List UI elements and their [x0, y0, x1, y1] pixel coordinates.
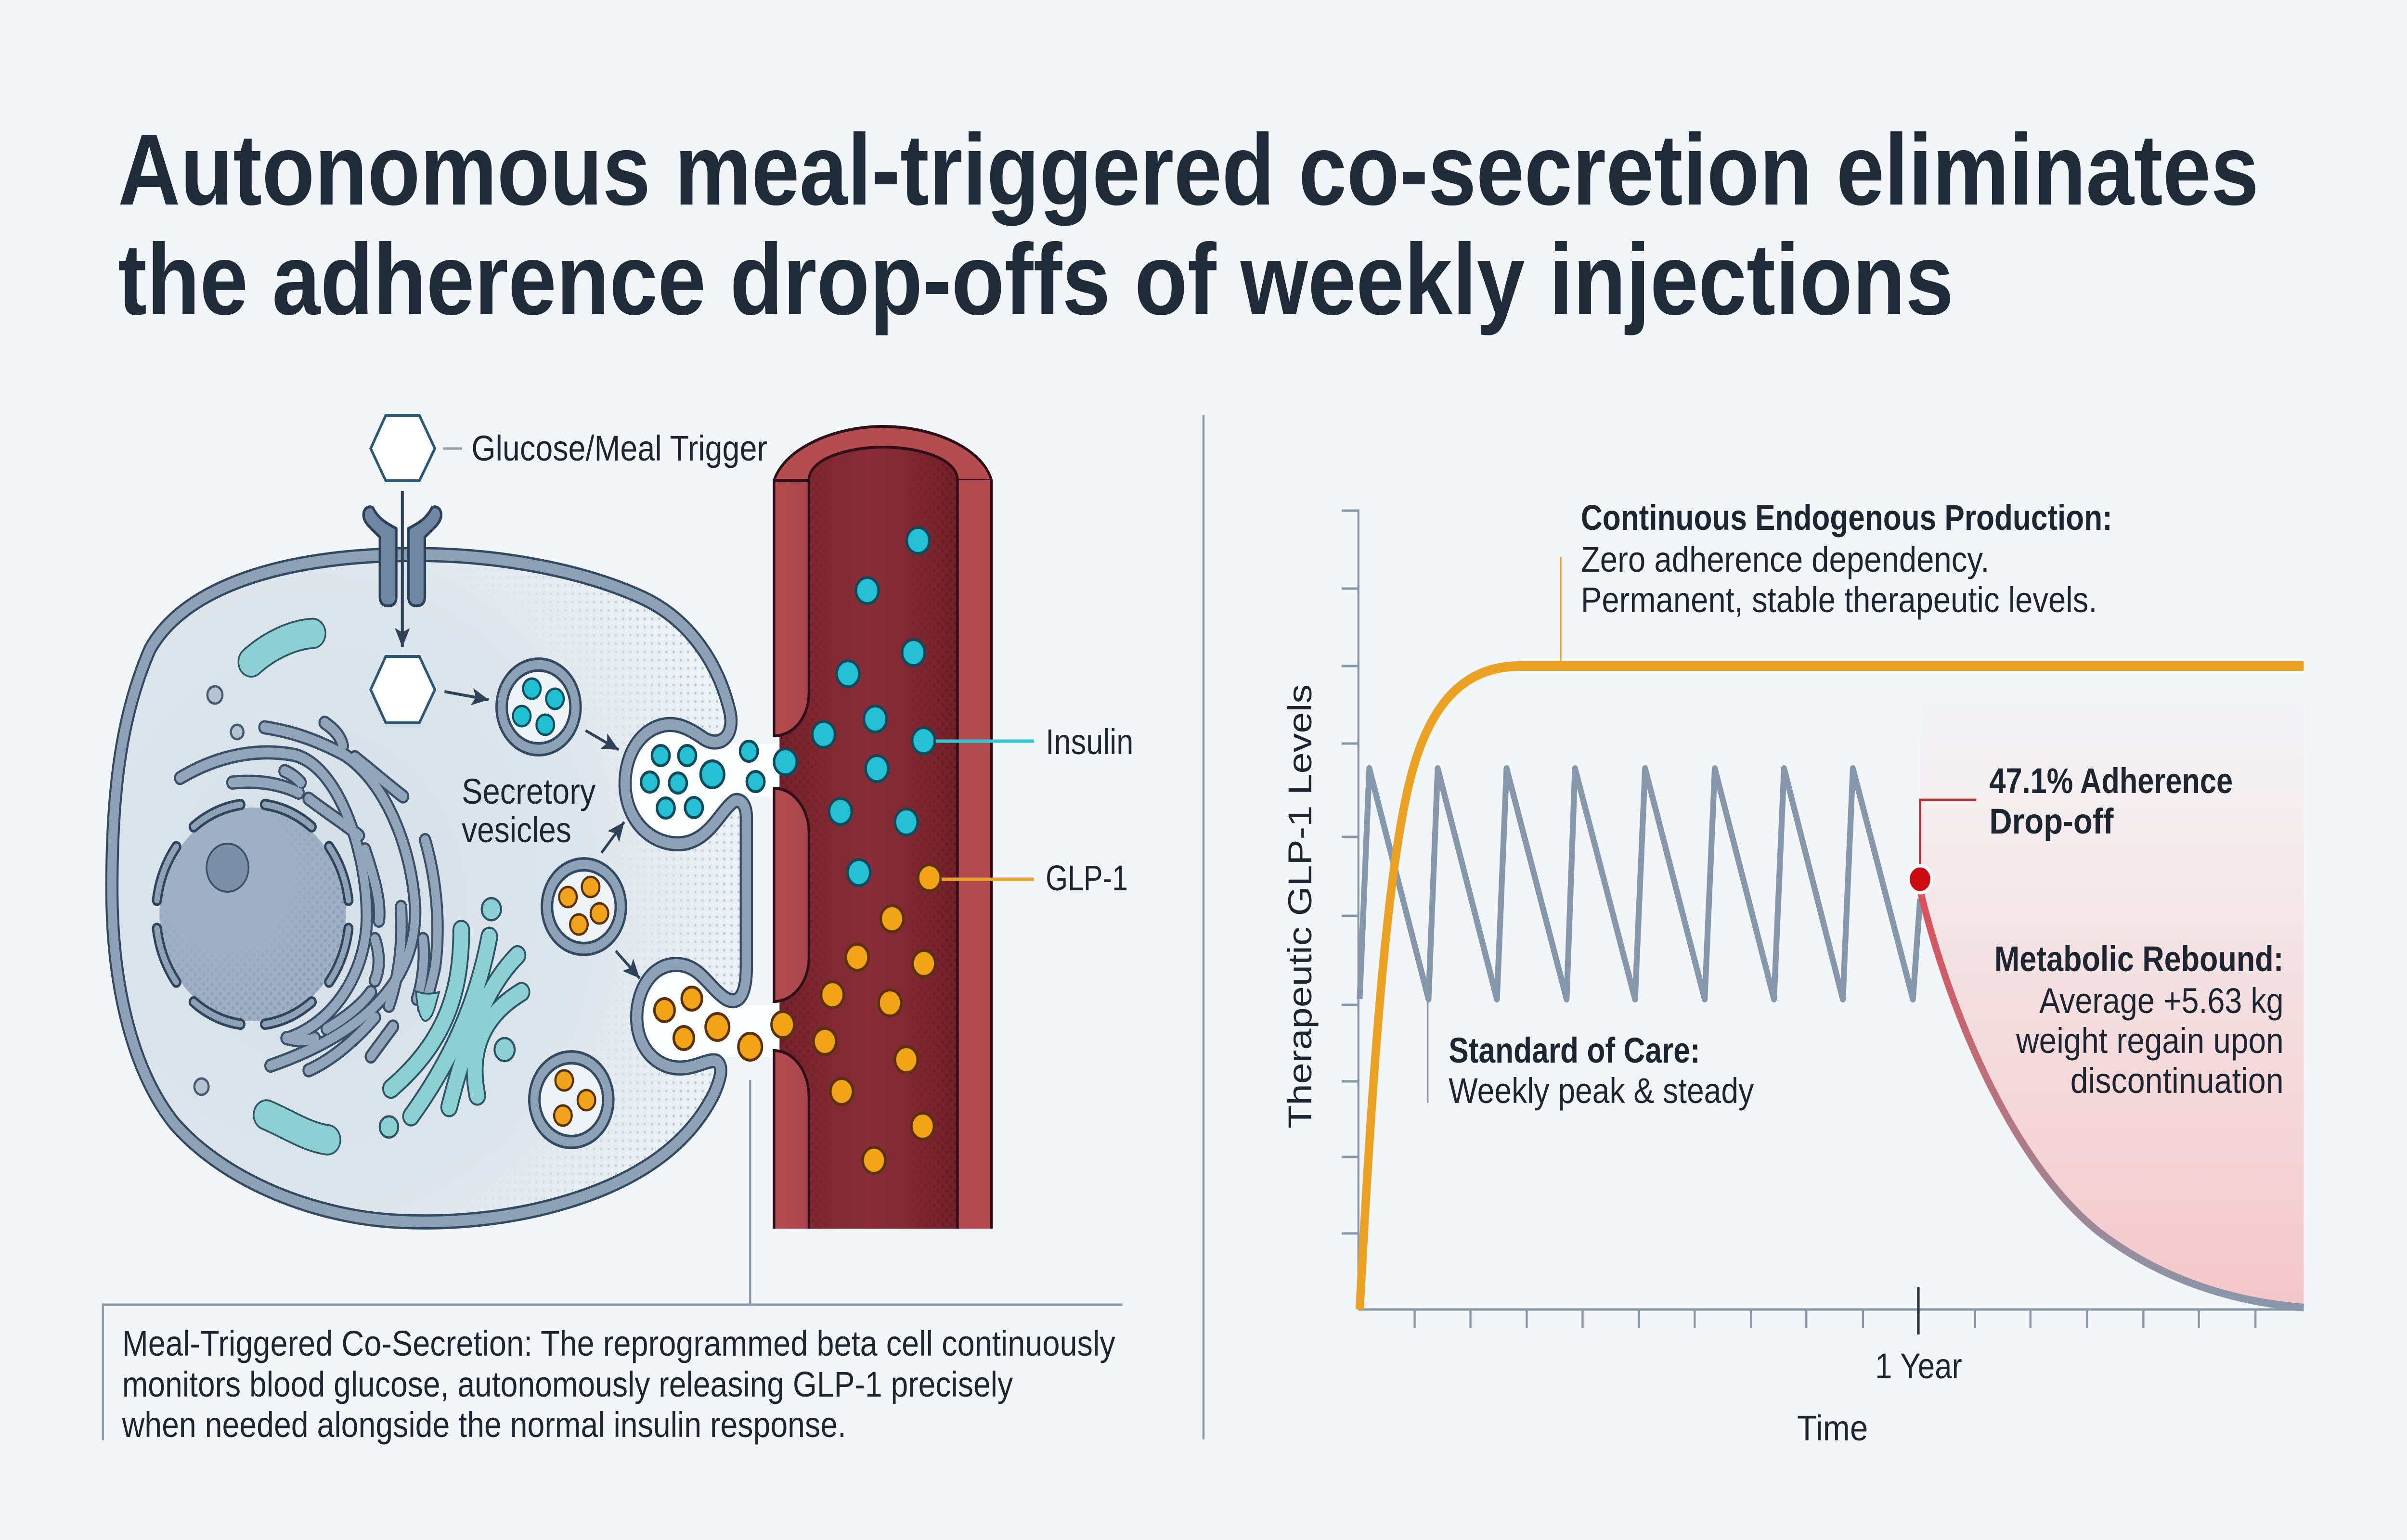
secretory vesicles label	[462, 771, 596, 850]
secretory vesicles label: Secretory	[462, 771, 596, 811]
callout: meal-triggered co-secretion: when needed alongside the normal insulin response.	[122, 1405, 846, 1445]
continuous production annotation: Permanent, stable therapeutic levels.	[1581, 580, 2097, 620]
x axis label: Time	[1797, 1408, 1868, 1448]
callout: meal-triggered co-secretion: monitors blood glucose, autonomously releasing GLP-1 precisely	[122, 1364, 1013, 1404]
insulin vesicle	[502, 665, 576, 749]
beta cell body	[112, 554, 781, 1222]
arrow: GLP-1 vesicle to upper membrane	[602, 822, 624, 853]
mitochondria	[251, 633, 327, 1140]
adherence drop-off marker and label: 47.1% Adherence	[1989, 761, 2233, 801]
metabolic rebound curve	[1920, 890, 2303, 1308]
1 year label: 1 Year	[1875, 1346, 1962, 1386]
weekly injection sawtooth line	[1359, 769, 1920, 999]
arrow: glucose entering cell	[401, 491, 404, 647]
metabolic rebound annotation: discontinuation	[2071, 1061, 2284, 1101]
continuous production annotation: Continuous Endogenous Production:	[1581, 498, 2112, 538]
blood vessel	[774, 426, 992, 1229]
icon: glucose hexagon outside	[371, 415, 435, 481]
metabolic rebound annotation: weight regain upon	[2016, 1021, 2284, 1061]
rebound shaded area	[1920, 674, 2303, 1308]
arrow: insulin vesicle to membrane	[585, 731, 619, 750]
callout: meal-triggered co-secretion: Meal-Triggered Co-Secretion: The reprogrammed beta cell continuously	[122, 1323, 1115, 1363]
continuous production annotation	[1561, 498, 2112, 663]
x axis	[1359, 1287, 2303, 1335]
y axis	[1342, 511, 1359, 1309]
icon: glucose hexagon inside	[371, 656, 435, 723]
title: the adherence drop-offs of weekly injections	[118, 223, 1954, 336]
GLP-1 label: GLP-1	[1046, 858, 1128, 898]
continuous production annotation: Zero adherence dependency.	[1581, 539, 1989, 579]
secretory vesicles label: vesicles	[462, 810, 571, 850]
nucleus	[156, 804, 349, 1025]
GLP-1 particles	[654, 865, 941, 1173]
insulin label: Insulin	[1046, 722, 1133, 762]
panel: beta cell and blood vessel diagram	[112, 415, 1133, 1229]
endoplasmic reticulum	[180, 723, 438, 1070]
metabolic rebound annotation	[1994, 939, 2284, 1101]
arrow: glucose to vesicle	[444, 692, 489, 700]
small organelles	[194, 686, 244, 1095]
insulin particles	[641, 527, 935, 886]
metabolic rebound annotation: Average +5.63 kg	[2039, 981, 2284, 1021]
adherence drop-off marker and label: Drop-off	[1989, 801, 2114, 841]
title	[118, 113, 2259, 336]
metabolic rebound annotation: Metabolic Rebound:	[1994, 939, 2284, 979]
receptor channel	[363, 507, 441, 606]
standard of care annotation: Standard of Care:	[1449, 1030, 1700, 1070]
GLP-1 vesicle	[547, 864, 621, 949]
continuous production orange line	[1359, 666, 2303, 1309]
second GLP-1 vesicle	[534, 1057, 608, 1142]
y axis label: Therapeutic GLP-1 Levels	[1281, 684, 1319, 1129]
standard of care annotation	[1428, 999, 1754, 1111]
golgi apparatus	[380, 898, 521, 1138]
standard of care annotation: Weekly peak & steady	[1449, 1071, 1754, 1111]
glucose label: Glucose/Meal Trigger	[471, 428, 767, 468]
callout: meal-triggered co-secretion	[103, 1080, 1123, 1445]
title: Autonomous meal-triggered co-secretion eliminates	[118, 113, 2259, 226]
arrow: GLP-1 vesicle to lower membrane	[616, 951, 640, 978]
panel: GLP-1 level chart	[1281, 498, 2303, 1448]
adherence drop-off marker and label	[1908, 761, 2233, 893]
